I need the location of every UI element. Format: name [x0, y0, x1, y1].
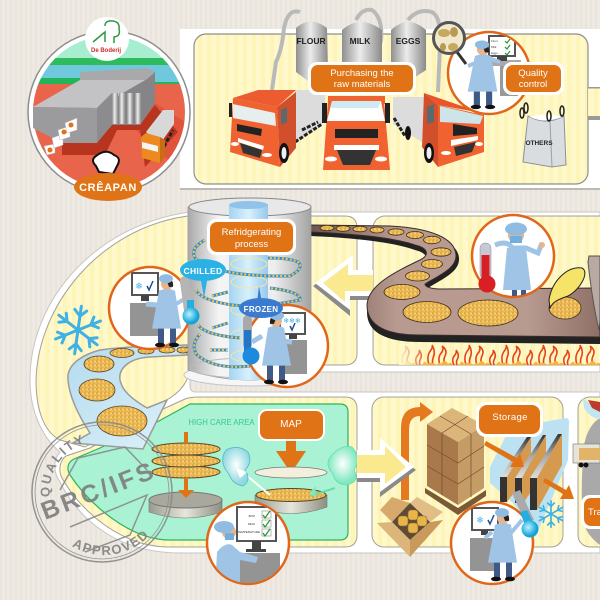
truck: left: [229, 90, 325, 167]
circle: chilled worker: ❄: [135, 281, 143, 291]
logo: Creapan: CRÊAPAN: [79, 181, 137, 194]
silo: flour: [272, 11, 328, 90]
arrow: right white: [357, 438, 416, 497]
circle: frozen worker: ❄❄❄: [283, 317, 301, 325]
stamp: BRC/IFS quality approved: QUALITY: [40, 434, 82, 496]
circle: frozen worker: [246, 305, 328, 387]
circle: storage worker: [451, 502, 533, 584]
callout: chilled: [180, 259, 226, 298]
building: [33, 68, 155, 143]
circle: MAP checklist worker: [207, 502, 289, 590]
icon: storage thermometer: [512, 490, 538, 538]
stamp: BRC/IFS quality approved: APPROVED: [72, 532, 147, 556]
conveyor: baking belt: [310, 225, 600, 344]
icon: snowflake small: [539, 501, 563, 527]
logo: De Boderij: De Boderij: [91, 48, 121, 54]
truck: center: [302, 96, 425, 170]
conveyor: blue freezer belt: [68, 345, 189, 449]
signs: [44, 118, 77, 155]
icon: magnifying glass: [434, 22, 466, 64]
callout: frozen: [239, 286, 283, 318]
label: quality control: [503, 62, 564, 95]
circle: quality control worker: Eggs: [491, 51, 498, 55]
tool: spatula: [588, 256, 600, 330]
pancakes on blue belt: [79, 347, 189, 436]
panel: raw materials: [180, 10, 600, 190]
panel: baking compartment: [373, 216, 600, 365]
blue storage room: [490, 418, 569, 533]
flames: [399, 344, 600, 365]
pallet of boxes: [425, 408, 486, 515]
trailer: [573, 444, 600, 468]
pancake stack and tray: [149, 432, 222, 518]
label: refrigerating process: [207, 219, 296, 255]
label: purchasing the raw materials: raw materials: [334, 79, 390, 90]
coin stacks: [398, 510, 427, 533]
panel: high care outer: [60, 397, 357, 547]
bag: others: [520, 103, 566, 167]
silo: flour: FLOUR: [296, 36, 326, 46]
pancakes on belt: [320, 225, 581, 326]
circle: quality control worker: Milk: [491, 45, 497, 49]
label: storage: [476, 402, 543, 437]
cardboard box with pancakes: [377, 497, 443, 557]
label: transport: [581, 495, 600, 529]
panel: loop compartment: [36, 216, 357, 447]
label: refrigerating process: Refridgerating: [222, 227, 281, 238]
arrows: storage flow: [484, 441, 574, 499]
bag: others: OTHERS: [525, 140, 553, 147]
title: high care area: HIGH CARE AREA: [188, 418, 255, 427]
gas puffs: [223, 446, 358, 498]
icon: chilled thermometer: [179, 275, 200, 324]
silo: milk: MILK: [350, 36, 371, 46]
callout: chilled: CHILLED: [184, 266, 222, 276]
panel: cooking and refrigeration frame: [30, 212, 600, 553]
MAP lid and tray: [255, 467, 327, 514]
circle: storage worker: ❄: [476, 515, 484, 525]
panel: storage: [372, 397, 563, 547]
panel: transport: [578, 397, 600, 547]
icon: red thermometer: [478, 243, 496, 292]
silo: eggs: EGGS: [396, 36, 421, 46]
small truck: [141, 110, 174, 163]
circle: temperature check worker: [472, 215, 554, 297]
flipped pancake: [549, 268, 585, 308]
arrow: MAP down: [276, 441, 306, 473]
orange arrows: [178, 432, 194, 498]
silo: eggs: [391, 11, 440, 92]
arrow: orange up and over: [401, 402, 433, 500]
label: MAP: MAP: [280, 419, 302, 430]
callout: frozen: FROZEN: [244, 305, 278, 314]
label: refrigerating process: process: [235, 239, 268, 250]
arrow: left white: [313, 255, 373, 316]
panel: high care area: [68, 404, 348, 540]
circle: quality control worker: Flour: [491, 39, 498, 43]
icon: snowflake: [54, 303, 102, 357]
label: purchasing the raw materials: Purchasing the: [330, 68, 394, 79]
silo: milk: [342, 10, 382, 84]
stamp: BRC/IFS quality approved: BRC/IFS: [37, 456, 160, 526]
label: quality control: Quality: [518, 68, 548, 79]
refrigeration cylinder: [184, 198, 316, 386]
truck: right: [393, 93, 484, 167]
circle: chilled worker: [109, 267, 191, 349]
circle: MAP checklist worker: BOP: [249, 514, 255, 518]
label: MAP: [258, 409, 325, 441]
icon: frozen thermometer: [242, 315, 260, 364]
spiral conveyor: [194, 240, 300, 367]
logo: De Boderij: [85, 17, 129, 61]
label: quality control: control: [519, 79, 547, 90]
circle: MAP checklist worker: TEMPERATURE: [238, 530, 260, 534]
circle: MAP checklist worker: MFAI: [248, 522, 255, 526]
label: purchasing the raw materials: [308, 62, 416, 95]
stamp: BRC/IFS quality approved: [31, 421, 173, 563]
circle: quality control worker: [448, 32, 530, 114]
logo: Creapan: [74, 152, 142, 201]
label: storage: Storage: [492, 412, 528, 423]
